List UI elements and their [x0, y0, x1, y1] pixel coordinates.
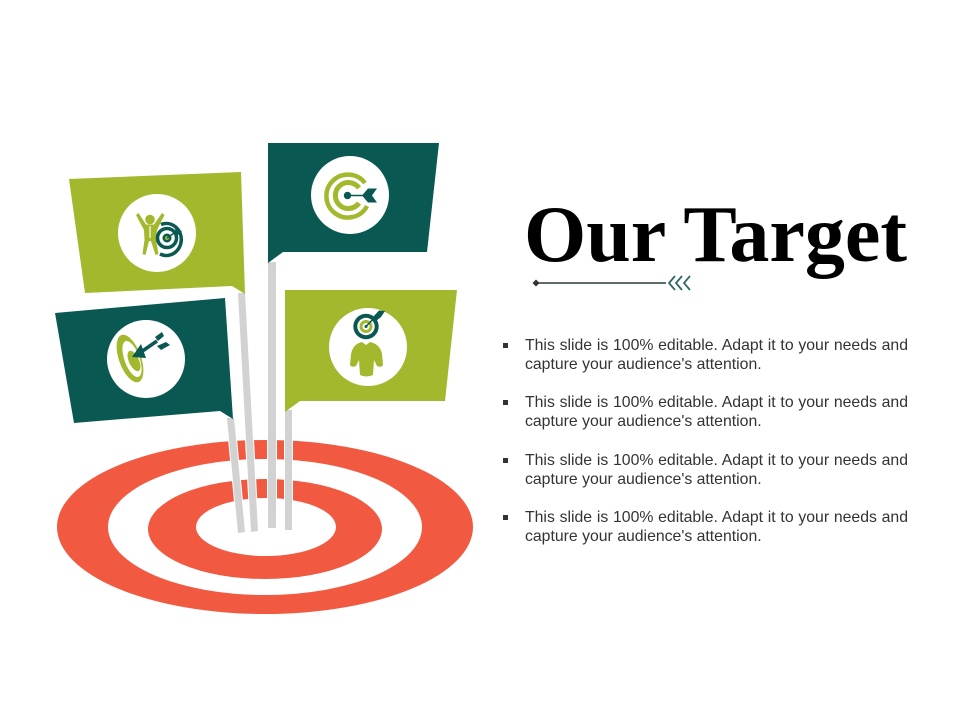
flag: dark left: [55, 298, 233, 423]
title: Our Target: [524, 191, 907, 279]
bullet 2: [503, 394, 908, 430]
title underline with chevrons: [532, 276, 690, 290]
bullet 1: capture your audience's attention.: [525, 356, 762, 373]
bullet 2: This slide is 100% editable. Adapt it to your needs and: [525, 394, 908, 411]
icon: concentric target with dart: [326, 175, 377, 218]
bullet 1: [503, 337, 908, 373]
bullet 1: This slide is 100% editable. Adapt it to your needs and: [525, 337, 908, 354]
flag: dark top: [268, 143, 439, 263]
target: [57, 440, 473, 614]
bullet 3: capture your audience's attention.: [525, 471, 762, 488]
flag: green right: [285, 290, 457, 412]
bullet 4: [503, 509, 908, 545]
bullet 4: This slide is 100% editable. Adapt it to your needs and: [525, 509, 908, 526]
bullet 3: [503, 452, 908, 488]
icon: arrow hitting target: [111, 331, 170, 386]
flag poles: [227, 262, 292, 533]
bullet 2: capture your audience's attention.: [525, 413, 762, 430]
icon: person with target: [136, 213, 182, 255]
bullet 3: This slide is 100% editable. Adapt it to your needs and: [525, 452, 908, 469]
flag: green left: [69, 172, 245, 294]
icon: person with target head: [350, 310, 385, 376]
bullet 4: capture your audience's attention.: [525, 528, 762, 545]
